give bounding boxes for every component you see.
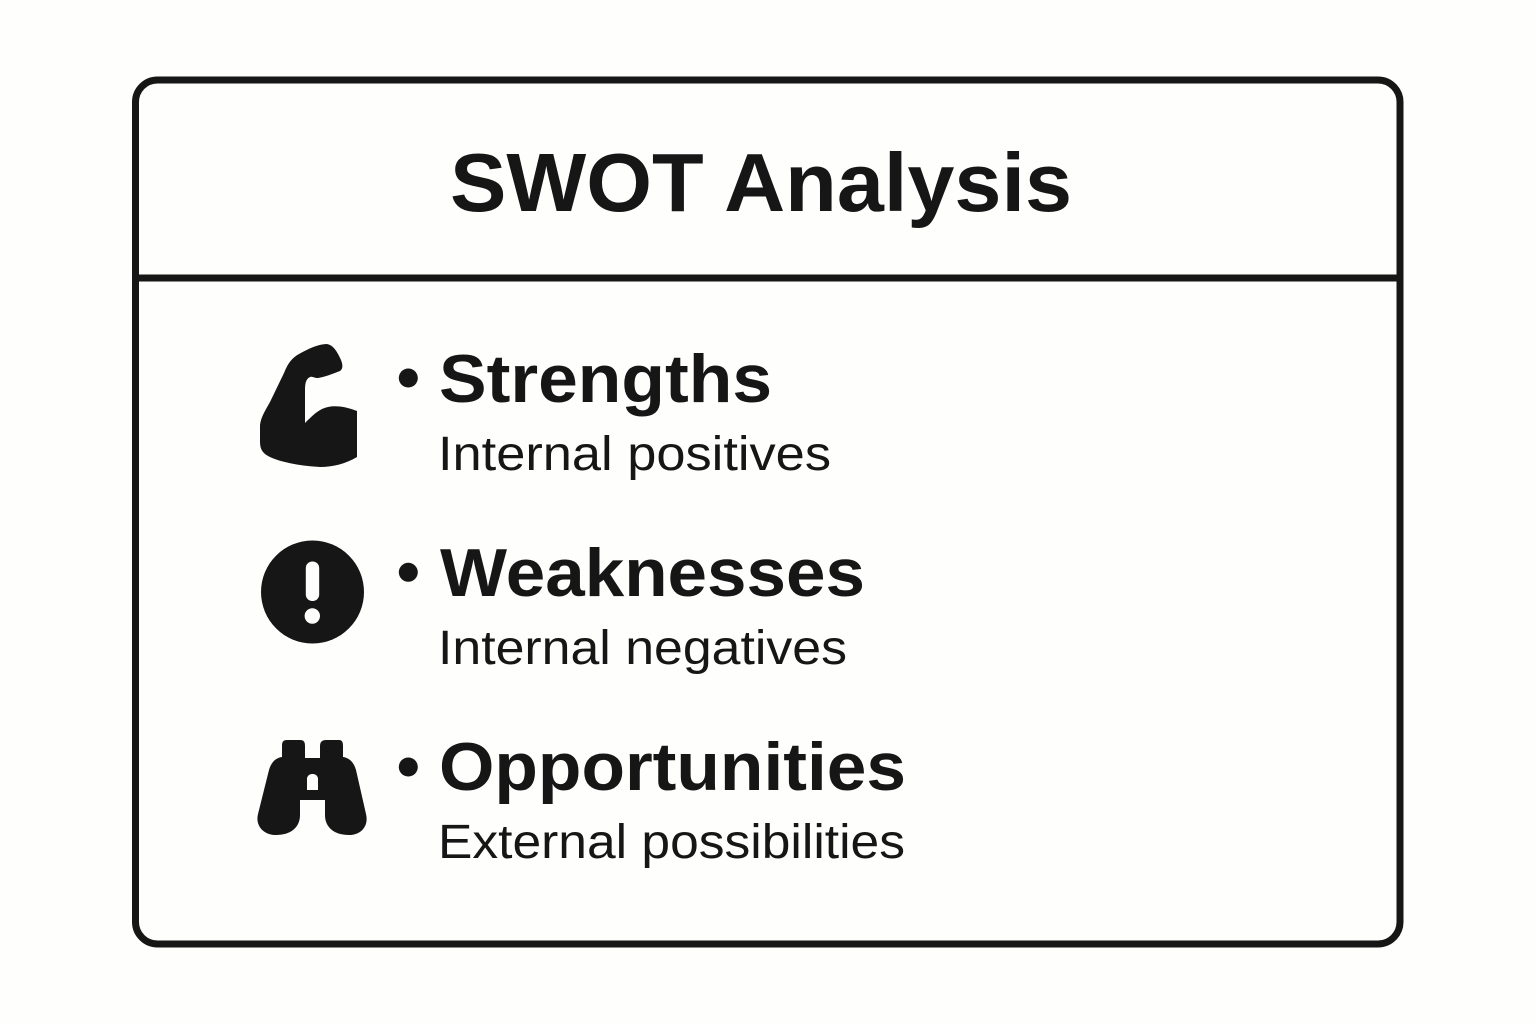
heading: weaknesses: Weaknesses: [440, 535, 865, 611]
panel: weaknesses row: [261, 535, 865, 675]
icon: exclamation circle: [261, 540, 364, 644]
text: opportunities description: External possibilities: [438, 816, 905, 869]
icon: flexed arm: [260, 344, 357, 467]
text: strengths description: Internal positives: [438, 428, 831, 481]
title: SWOT Analysis: [450, 136, 1072, 229]
panel: SWOT card frame: [136, 80, 1400, 944]
heading: strengths: Strengths: [439, 341, 772, 417]
text: weaknesses description: Internal negatives: [438, 622, 847, 675]
bullet: weaknesses: [399, 563, 418, 582]
panel: opportunities row: [257, 729, 906, 869]
heading: opportunities: Opportunities: [439, 729, 906, 805]
bullet: strengths: [399, 368, 418, 388]
icon: binoculars: [257, 740, 367, 835]
panel: strengths row: [260, 341, 831, 481]
bullet: opportunities: [399, 758, 418, 776]
